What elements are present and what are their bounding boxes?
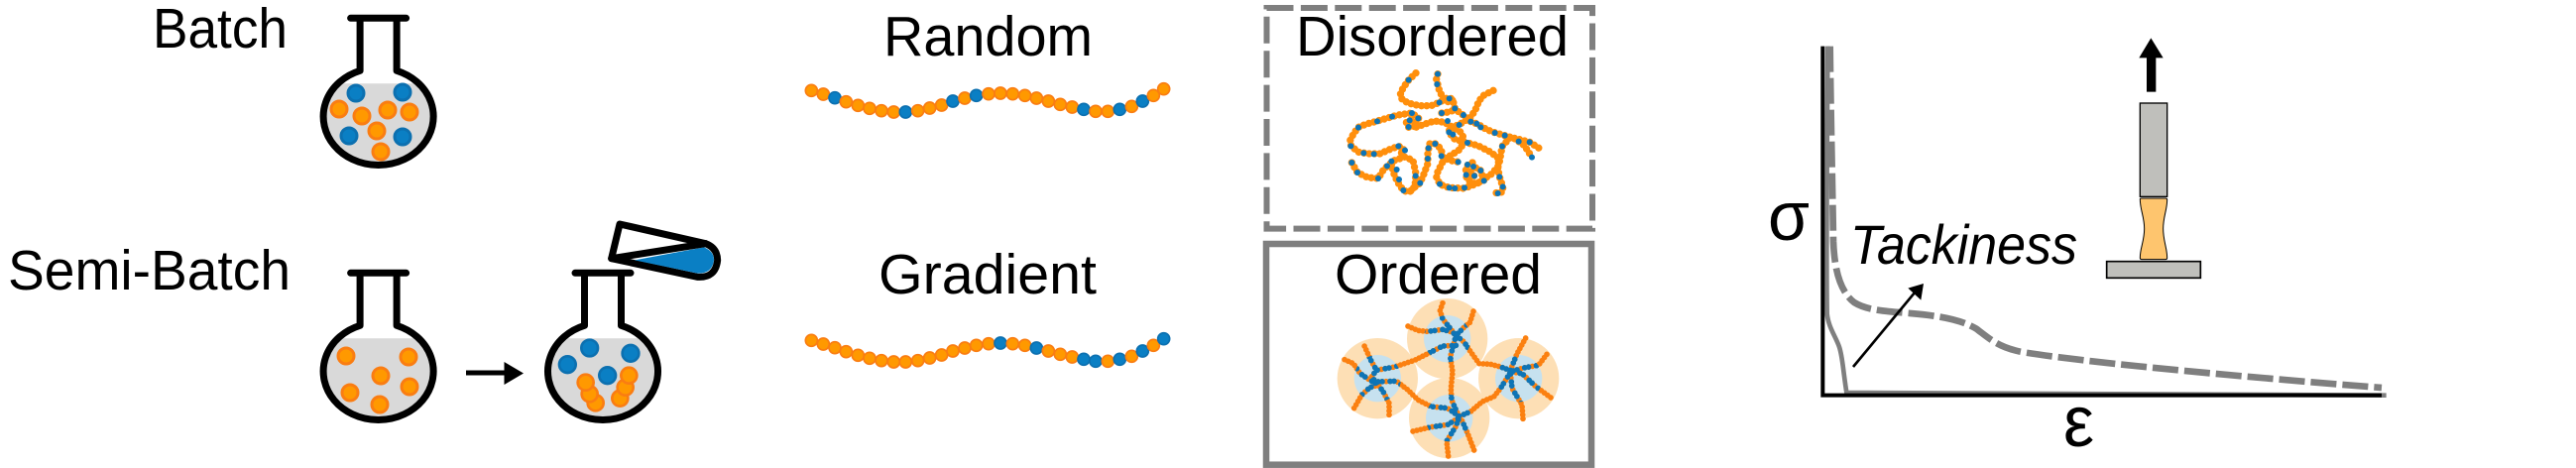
- axes: [1822, 47, 2382, 396]
- icon: semi-batch flask during addition: [547, 273, 658, 420]
- arrow: flask to flask: [466, 362, 524, 385]
- axis label: epsilon: ε: [2063, 383, 2094, 462]
- micelle network: [1338, 298, 1559, 458]
- tangled polymer chains: [1347, 71, 1543, 196]
- heading: Ordered: Ordered: [1335, 243, 1542, 306]
- curve: dashed gray: [1830, 47, 2382, 388]
- icon: tensile test specimen: [2107, 38, 2200, 278]
- icon: semi-batch flask before addition: [323, 273, 433, 420]
- axis label: sigma: σ: [1768, 177, 1810, 255]
- panel frame: dashed: [1267, 8, 1592, 229]
- icon: pouring vial: [612, 224, 718, 277]
- chain: random copolymer: [805, 83, 1170, 118]
- heading: Disordered: Disordered: [1296, 5, 1569, 68]
- chain: gradient copolymer: [805, 333, 1170, 368]
- arrow: tackiness increase: [1853, 284, 1924, 367]
- label: Gradient: Gradient: [878, 243, 1097, 306]
- arrow: pull direction: [2139, 38, 2164, 92]
- label: Tackiness: Tackiness: [1850, 213, 2077, 276]
- upper grip: [2140, 103, 2167, 196]
- panel: disordered: [1267, 5, 1592, 229]
- icon: batch flask with both monomers: [323, 18, 433, 166]
- panel: ordered: [1266, 243, 1591, 465]
- panel frame: solid: [1266, 244, 1591, 465]
- lower grip: [2107, 262, 2200, 278]
- chart: stress-strain curves: [1822, 47, 2387, 396]
- label: Semi-Batch: Semi-Batch: [8, 239, 291, 302]
- dogbone specimen: [2140, 198, 2167, 260]
- label: Random: Random: [883, 5, 1093, 68]
- curve: solid gray: [1826, 47, 2387, 396]
